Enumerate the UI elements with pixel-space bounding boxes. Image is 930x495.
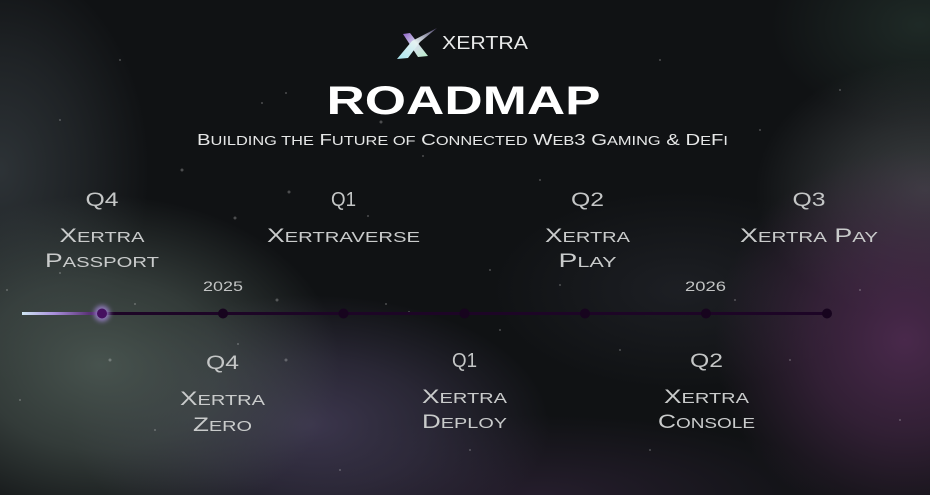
- timeline: [22, 306, 832, 322]
- node: Q1: [460, 308, 470, 318]
- milestone: Xertra Passport: X ERTRA: [60, 226, 145, 247]
- milestone: Xertra Zero: [180, 353, 265, 436]
- node: Q2 2026: [701, 308, 711, 318]
- milestone: Xertra Play: X ERTRA: [545, 226, 630, 247]
- milestone: Xertra Deploy: X ERTRA: [422, 387, 507, 408]
- milestone: Xertraverse: X ERTRAVERSE: [267, 226, 420, 247]
- icon: X mark: [397, 28, 437, 59]
- milestone: Xertraverse: [267, 189, 420, 247]
- milestone: Xertra Passport: [45, 190, 159, 272]
- progress segment: [22, 312, 102, 315]
- milestone: Xertra Deploy: [422, 350, 507, 433]
- subtitle: B UILDING THE F UTURE OF C ONNECTED W EB 3 G AMING & D EFI: [197, 132, 728, 149]
- milestone: Xertra Zero: Q4: [206, 353, 240, 374]
- milestone: Xertra Play: Q2: [571, 190, 604, 211]
- milestone: Xertra Console: Q2: [690, 351, 723, 372]
- milestone: Xertra Console: C ONSOLE: [658, 412, 755, 433]
- milestone: Xertra Console: [658, 351, 755, 433]
- milestone: Xertra Zero: Z ERO: [193, 415, 252, 436]
- timeline track: [100, 312, 827, 315]
- logo: [397, 28, 528, 59]
- active node glow: [94, 306, 110, 322]
- node: Q1 2025: [338, 308, 348, 318]
- milestone: Xertra Deploy: D EPLOY: [422, 412, 507, 433]
- year label 2025: 2025: [203, 278, 243, 294]
- node: Q2: [580, 308, 590, 318]
- year label 2026: 2026: [685, 278, 726, 294]
- milestone: Xertra Pay: [740, 190, 878, 247]
- milestone: Xertraverse: Q1: [331, 189, 356, 211]
- milestone: Xertra Play: P LAY: [558, 251, 617, 272]
- milestone: Xertra Zero: X ERTRA: [180, 389, 265, 410]
- brand name: XERTRA: [442, 33, 528, 53]
- milestone: Xertra Deploy: Q1: [452, 350, 477, 372]
- node: Q3: [822, 308, 832, 318]
- milestone: Xertra Passport: Q4: [86, 190, 119, 211]
- title: ROADMAP: [326, 79, 600, 123]
- milestone: Xertra Play: [545, 190, 630, 272]
- milestone: Xertra Console: X ERTRA: [664, 387, 749, 408]
- active node: [97, 308, 107, 318]
- milestone: Xertra Pay: Q3: [792, 190, 826, 211]
- node: Q4 2025: [218, 308, 228, 318]
- milestone: Xertra Pay: X ERTRA P AY: [740, 226, 878, 247]
- milestone: Xertra Passport: P ASSPORT: [45, 251, 159, 272]
